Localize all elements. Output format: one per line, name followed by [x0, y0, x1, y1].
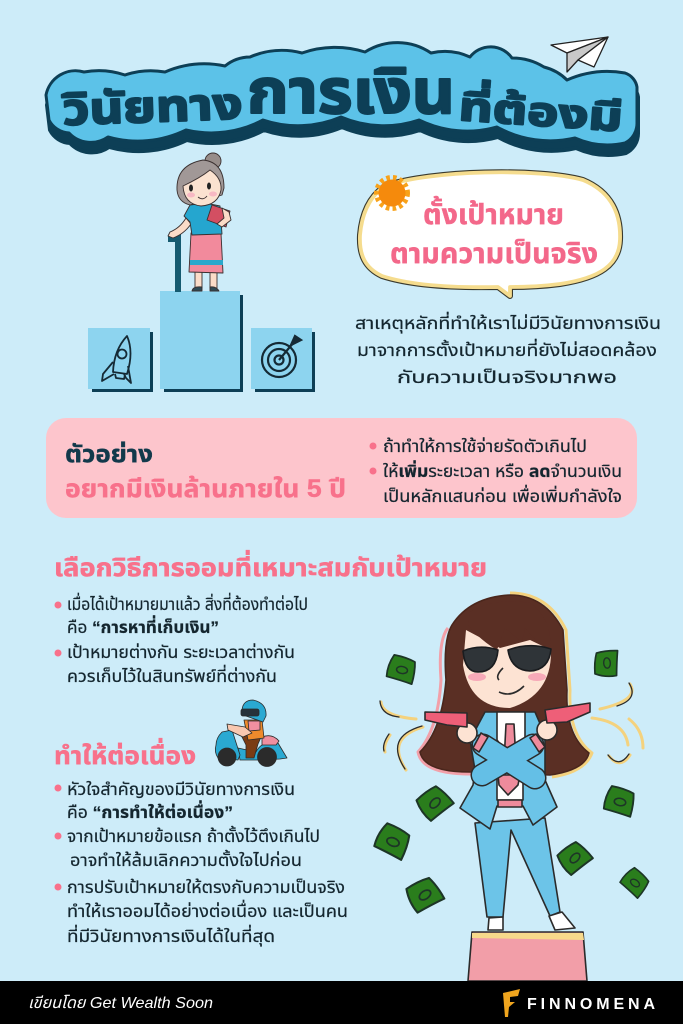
rider legs — [240, 733, 262, 758]
scooter rear body — [238, 742, 287, 760]
keep going bullets — [54, 780, 348, 947]
title text: การเงิน — [247, 58, 455, 127]
toy guns — [425, 703, 590, 727]
panel: example — [46, 418, 637, 518]
intro paragraph: มาจากการตั้งเป้าหมายที่ยังไม่สอดคล้อง — [357, 338, 657, 360]
keep going bullets: ทำให้เราออมได้อย่างต่อเนื่อง และเป็นคน — [67, 899, 348, 921]
legs — [195, 270, 217, 288]
example bullets — [370, 436, 622, 506]
savings bullets — [54, 592, 308, 686]
woman with sunglasses and money illustration — [369, 593, 653, 981]
title blob shadow — [47, 53, 638, 155]
keep going bullets: หัวใจสำคัญของมีวินัยทางการเงิน — [67, 780, 295, 799]
title blob — [46, 43, 637, 145]
blouse — [184, 203, 222, 235]
example bullets: เป็นหลักแสนก่อน เพื่อเพิ่มกำลังใจ — [383, 484, 622, 506]
example goal: อยากมีเงินล้านภายใน 5 ปี — [65, 475, 346, 503]
hands — [457, 723, 477, 743]
intro paragraph — [355, 311, 661, 387]
scooter seat — [262, 736, 279, 745]
wheels — [218, 748, 236, 766]
skirt — [189, 233, 223, 273]
bubble heading: ตั้งเป้าหมาย — [423, 195, 564, 230]
podium shadows — [92, 295, 315, 392]
book — [207, 205, 230, 227]
icon: sun — [377, 178, 407, 208]
savings bullets: ควรเก็บไว้ในสินทรัพย์ที่ต่างกัน — [67, 664, 277, 686]
sunglasses — [463, 646, 551, 672]
keep going bullets: คือ “การทำให้ต่อเนื่อง” — [67, 800, 233, 822]
flying banknotes — [369, 644, 653, 914]
smile — [499, 686, 524, 694]
pink hair halo — [418, 628, 500, 775]
title text — [61, 58, 625, 140]
belt — [498, 800, 522, 807]
cane — [168, 234, 181, 292]
rider vest — [244, 720, 264, 740]
keep going bullets: จากเป้าหมายข้อแรก ถ้าตั้งไว้ตึงเกินไป — [67, 825, 320, 846]
icon: target — [262, 336, 301, 377]
logo mark — [503, 989, 520, 1017]
bangs — [468, 601, 551, 652]
bubble heading: ตามความเป็นจริง — [390, 238, 598, 269]
panel background — [46, 418, 637, 518]
title banner — [46, 43, 638, 155]
rider shirt — [248, 721, 260, 731]
example label: ตัวอย่าง — [65, 440, 153, 468]
pink pedestal — [468, 932, 587, 981]
hair — [177, 160, 224, 205]
grandmother illustration — [168, 153, 231, 292]
eyes and cheeks — [187, 182, 217, 198]
title text: ที่ต้องมี — [457, 78, 625, 140]
intro paragraph: กับความเป็นจริงมากพอ — [397, 368, 617, 387]
pink cuffs — [473, 733, 545, 752]
tie — [498, 724, 520, 795]
example bullets: ให้เพิ่มระยะเวลา หรือ ลดจำนวนเงิน — [383, 460, 622, 481]
heading: keep going: ทำให้ต่อเนื่อง — [54, 738, 196, 770]
face — [183, 170, 221, 206]
icon: scooter rider — [215, 700, 287, 766]
jacket — [460, 712, 557, 829]
motion swooshes, dark — [380, 683, 632, 769]
icon: paper airplane — [551, 37, 608, 72]
title text: วินัยทาง — [61, 80, 243, 135]
motion swooshes, yellow — [381, 684, 643, 770]
logo wordmark: FINNOMENA — [527, 996, 655, 1013]
shirt — [497, 712, 525, 800]
bubble heading — [390, 195, 598, 269]
sandals — [192, 287, 219, 291]
hair bun — [205, 153, 221, 169]
arm holding book — [217, 208, 231, 227]
crossed arms — [482, 745, 535, 778]
arm with hand on cane — [168, 218, 191, 238]
nose — [498, 668, 503, 680]
yellow hair halo — [510, 593, 592, 777]
cheeks — [468, 673, 546, 681]
legs — [475, 818, 560, 917]
example bullets: ถ้าทำให้การใช้จ่ายรัดตัวเกินไป — [383, 436, 587, 456]
keep going bullets: การปรับเป้าหมายให้ตรงกับความเป็นจริง — [67, 877, 345, 897]
bubble outline — [360, 172, 620, 296]
scooter front — [215, 730, 240, 760]
intro paragraph: สาเหตุหลักที่ทำให้เราไม่มีวินัยทางการเงิน — [355, 311, 661, 334]
bubble yellow rim — [360, 172, 620, 296]
podium boxes — [88, 291, 312, 389]
hair back — [420, 595, 589, 775]
author credit: เขียนโดย Get Wealth Soon — [28, 994, 213, 1012]
speech bubble: set realistic goals — [360, 172, 620, 296]
keep going bullets: อาจทำให้ล้มเลิกความตั้งใจไปก่อน — [70, 849, 302, 870]
podium with grandmother — [88, 153, 315, 392]
icon: rocket — [102, 336, 131, 383]
shoes — [488, 912, 575, 930]
savings bullets: เมื่อได้เป้าหมายมาแล้ว สิ่งที่ต้องทำต่อไป — [67, 592, 308, 614]
savings bullets: เป้าหมายต่างกัน ระยะเวลาต่างกัน — [67, 643, 295, 662]
keep going bullets: ที่มีวินัยทางการเงินได้ในที่สุด — [67, 924, 275, 947]
footer bar — [0, 981, 683, 1024]
savings bullets: คือ “การหาที่เก็บเงิน” — [67, 615, 219, 637]
face — [463, 630, 551, 708]
rider arm — [227, 724, 252, 737]
helmet — [242, 700, 266, 722]
heading: choose a savings method: เลือกวิธีการออมที่เหมาะสมกับเป้าหมาย — [54, 550, 487, 582]
